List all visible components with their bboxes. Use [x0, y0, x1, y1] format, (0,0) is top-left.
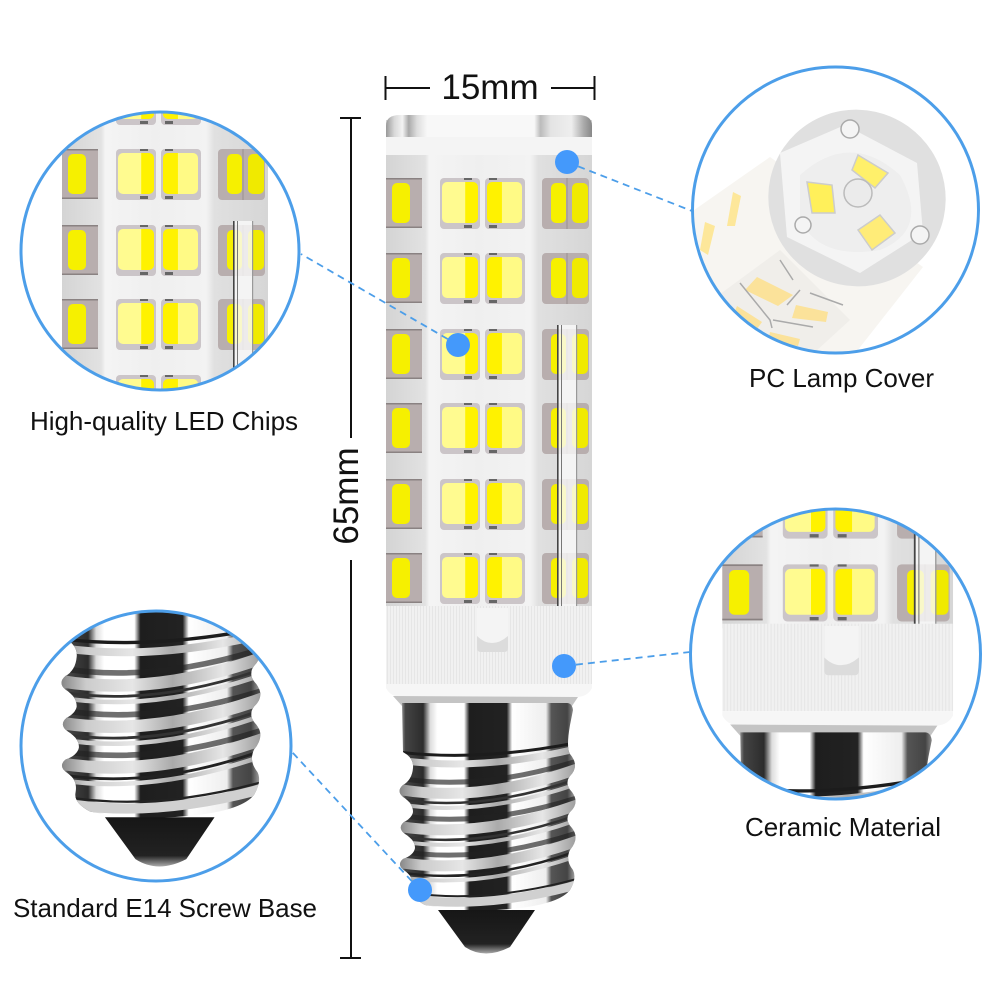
- panel: E14 screw base: [20, 610, 292, 882]
- main bulb illustration: [386, 115, 592, 954]
- panel: high-quality LED chips: [20, 110, 300, 392]
- height dimension: 65mm: 65mm: [327, 447, 366, 545]
- callout: screw base leader: [292, 752, 432, 902]
- panel: ceramic material: [689, 508, 982, 800]
- callout: LED chips leader: [301, 254, 470, 357]
- callout: lamp cover leader: [555, 150, 692, 211]
- callout: ceramic leader: [552, 652, 690, 678]
- width dimension: 15mm: [385, 68, 594, 107]
- panel: PC lamp cover: [680, 67, 980, 360]
- height dimension: 65mm: [327, 118, 366, 958]
- label: screw base: Standard E14 Screw Base: [13, 893, 317, 923]
- label: LED chips: High-quality LED Chips: [30, 406, 298, 436]
- label: ceramic material: Ceramic Material: [745, 812, 941, 842]
- label: PC lamp cover: PC Lamp Cover: [749, 363, 934, 393]
- width dimension: 15mm: 15mm: [441, 68, 539, 107]
